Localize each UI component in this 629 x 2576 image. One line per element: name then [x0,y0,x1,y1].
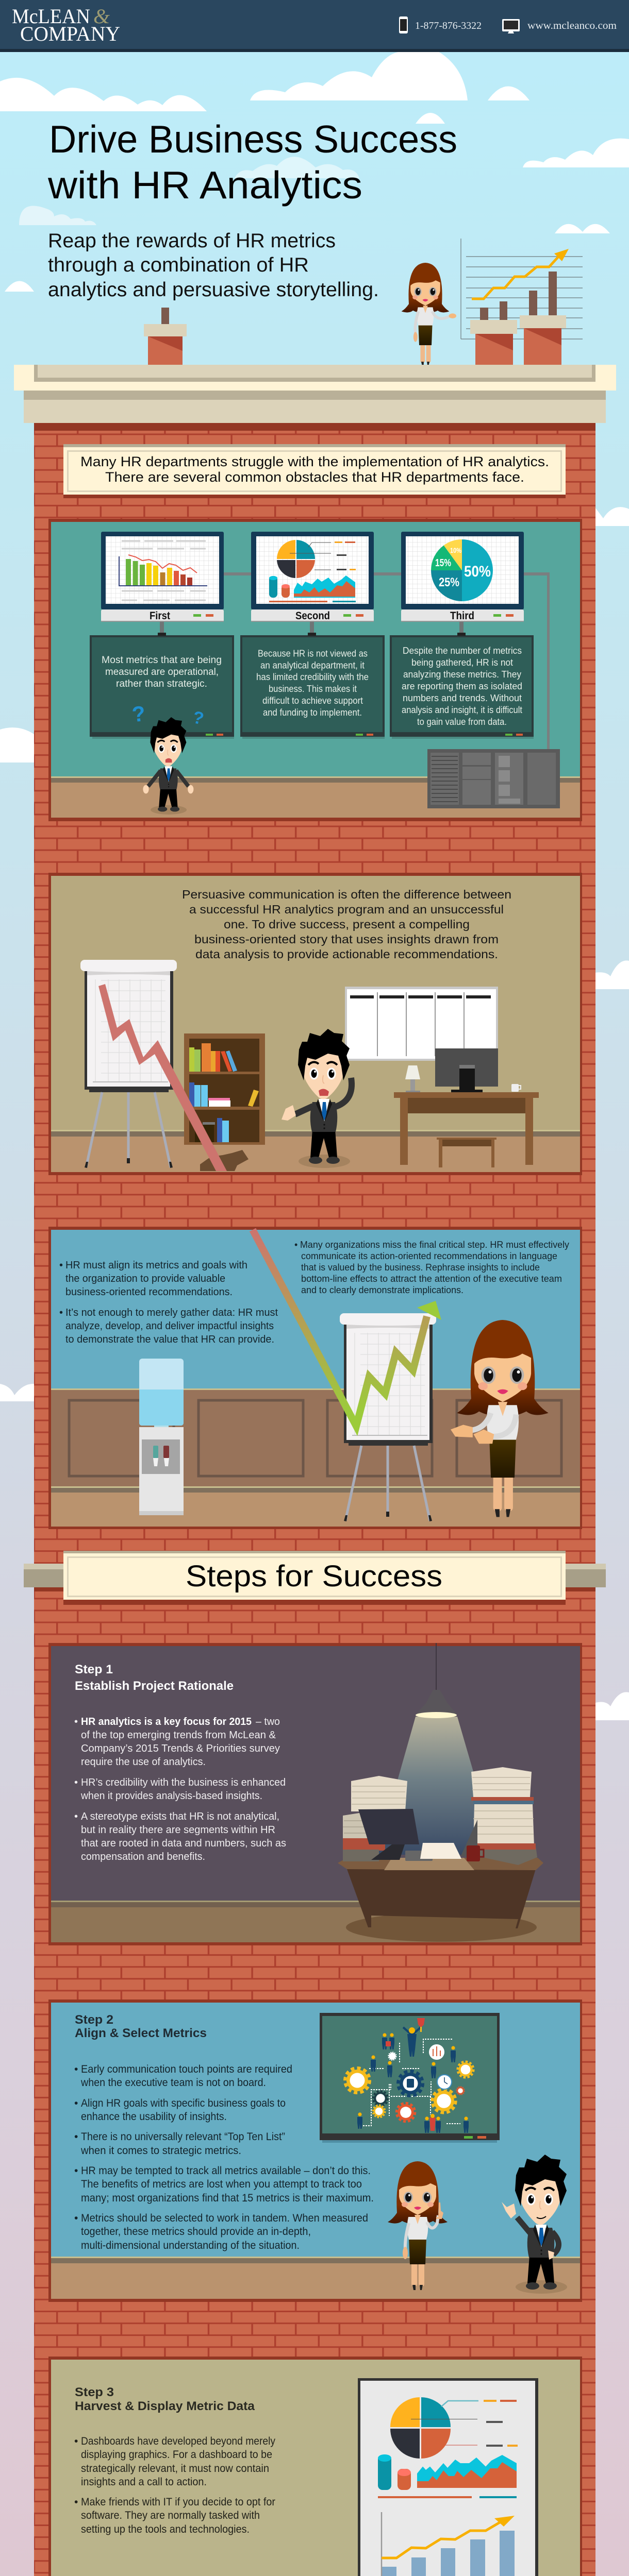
brick building [34,423,595,2576]
panel: obstacles [48,519,582,821]
banner: steps for success: Steps for Success [186,1560,442,1593]
heading: step 1 [75,1663,234,1693]
text block: step 3 bullets: Make friends with IT if you decide to opt for [81,2496,275,2508]
monitor: second: Second [295,610,330,622]
text block: step 1 bullets: • [74,1777,78,1788]
banner: steps for success [24,1551,606,1605]
text block: step 1 bullets: require the use of analytics. [81,1756,206,1768]
window blinds [345,987,498,1061]
board: third obstacle: analysis and insight, it is difficult [402,705,522,715]
text block: persuasive communication: one. To drive success, present a compelling [224,918,470,931]
text block: step 1 bullets: compensation and benefits. [81,1851,205,1862]
text block: step 2 bullets: • [74,2165,78,2177]
text block: step 2 bullets: • [74,2063,78,2075]
text block: step 1 bullets: Company’s 2015 Trends & Priorities survey [81,1743,280,1754]
text block: step 1 bullets: but in reality there are segments within HR [81,1824,275,1836]
board: dashboard [358,2378,538,2576]
desktop computer [358,1809,484,1861]
text block: final step: communicate its action-oriented recommendations in language [301,1251,557,1261]
text block: align metrics: the organization to provide valuable [65,1273,225,1284]
board: third obstacle: analyzing these metrics. They [403,669,521,680]
text block: align metrics: to demonstrate the value that HR can provide. [65,1334,274,1345]
pie chart [390,2397,518,2459]
text block: step 3 bullets: • [74,2435,78,2447]
text block: step 1 bullets [74,1716,286,1862]
title: with HR Analytics [47,163,362,207]
text block: persuasive communication: business-oriented story that uses insights drawn from [194,933,499,946]
text block: align metrics: HR must align its metrics and goals with [65,1260,247,1271]
bookshelf [184,1033,265,1145]
monitor: third: 10% [450,546,461,554]
board: second obstacle: and funding to implement. [263,707,362,718]
phone number: 1-877-876-3322 [415,20,482,31]
monitor: third: Third [450,610,474,622]
text block: step 1 bullets: • [74,1811,78,1822]
text block: step 2 bullets: HR may be tempted to track all metrics available – don’t do this. [81,2165,371,2177]
board: third obstacle: numbers and trends. Without [403,693,522,703]
character: woman pointing up [388,2161,448,2290]
text block: step 2 bullets: many; most organizations find that 15 metrics is their maximum. [81,2192,374,2204]
logo: McLEAN [12,5,90,28]
text block: step 2 bullets: together, these metrics should provide an in-depth, [81,2226,311,2238]
chimneys as bars [144,272,566,365]
text block: align metrics: • [59,1307,63,1318]
character: man scratching head [282,1029,352,1168]
board: second obstacle: difficult to achieve support [262,696,363,706]
panel: step 2 [48,1999,582,2302]
monitor: third [401,532,524,622]
panel: final critical step [48,1227,582,1529]
banner: intro: Many HR departments struggle with the implementation of HR analytics. [80,454,549,469]
text block: step 1 bullets: • [74,1716,78,1727]
text block: step 3 bullets: insights and a call to action. [81,2476,207,2488]
board: third obstacle: Despite the number of metrics [403,646,522,656]
text block: align metrics: It’s not enough to merely gather data: HR must [65,1307,278,1318]
text block: final step: and to clearly demonstrate implications. [301,1285,464,1295]
text block: step 2 bullets: when the executive team is not on board. [80,2077,266,2089]
character: worried man [143,717,193,815]
text block: step 2 bullets: Metrics should be selected to work in tandem. When measured [81,2212,368,2224]
water cooler [139,1359,184,1515]
text block: persuasive communication: a successful HR analytics program and an unsuccessful [189,903,504,916]
text block: step 3 bullets [74,2435,275,2535]
website: www.mcleanco.com [527,20,617,31]
icon: question marks: ? [131,701,146,726]
text block: persuasive communication [182,888,511,961]
text block: step 3 bullets: software. They are normally tasked with [81,2510,260,2521]
board: third obstacle: being gathered, HR is not [411,657,513,668]
text block: step 2 bullets [74,2063,374,2251]
board: second obstacle: business. This makes it [269,684,357,694]
subtitle: Reap the rewards of HR metrics [48,230,336,252]
heading: step 3: Step 3 [75,2385,114,2399]
text block: step 2 bullets: Align HR goals with specific business goals to [81,2097,286,2109]
arrow: falling trend [98,984,249,1171]
text block: step 1 bullets: that are rooted in data and numbers, such as [81,1838,286,1849]
roof cornice [14,365,616,423]
text block: step 2 bullets: There is no universally relevant “Top Ten List” [81,2131,285,2143]
illustration: lamp over desk [338,1643,543,1942]
banner: intro: There are several common obstacles that HR departments face. [105,469,524,485]
board: second obstacle: an analytical department, it [260,660,365,671]
board: first obstacle [90,633,234,739]
heading: step 2: Step 2 [75,2013,113,2027]
subtitle: analytics and persuasive storytelling. [48,279,379,301]
text block: step 2 bullets: The benefits of metrics are lost when you attempt to track too [81,2178,362,2190]
text block: final step: Many organizations miss the final critical step. HR must effectively [300,1240,569,1250]
flip chart [340,1313,436,1521]
heading: step 2 [75,2013,207,2040]
flip chart [80,960,177,1168]
character: woman presenting [451,1320,549,1517]
text block: align metrics: analyze, develop, and deliver impactful insights [65,1320,274,1332]
heading: step 3 [75,2385,255,2413]
arrow: rising trend [253,1230,441,1426]
panel: step 1 [48,1643,582,1945]
logo [12,5,120,45]
text block: step 1 bullets: HR’s credibility with the business is enhanced [81,1777,286,1788]
presenter: woman on roof [402,263,456,366]
subtitle [48,230,379,301]
text block: step 2 bullets: enhance the usability of insights. [81,2111,227,2123]
clouds [0,52,629,1720]
monitor: third: 15% [435,557,451,569]
monitor: third: 25% [439,575,459,589]
text block: step 3 bullets: displaying graphics. For a dashboard to be [81,2449,272,2461]
title [47,117,457,207]
board: third obstacle [390,633,534,739]
text block: final step: bottom-line effects to attract the attention of the executive team [301,1274,562,1284]
text block: step 2 bullets: when it comes to strategic metrics. [80,2145,241,2157]
monitor: first: First [150,610,170,622]
banner: intro [63,444,566,498]
icon: question marks [131,701,206,729]
paper stacks [343,1767,537,1865]
text block: persuasive communication: data analysis to provide actionable recommendations. [195,947,498,961]
character: man pointing [502,2155,567,2294]
header bar [0,0,629,52]
logo: COMPANY [20,22,120,45]
cylinders and area chart [378,2454,517,2498]
title: Drive Business Success [49,117,457,161]
panel: step 3 [48,2357,582,2576]
text block: step 3 bullets: Dashboards have developed beyond merely [81,2435,275,2447]
text block: step 2 bullets: Early communication touch points are required [81,2063,292,2075]
monitor: third: 50% [464,563,491,580]
text block: final step [294,1240,569,1295]
text block: step 3 bullets: • [74,2496,78,2508]
logo: & [93,5,110,28]
heading: step 1: Step 1 [75,1663,113,1676]
text block: align metrics: • [59,1260,63,1271]
text block: final step: • [294,1240,297,1250]
text block: step 1 bullets: A stereotype exists that HR is not analytical, [81,1811,279,1822]
desk with computer [394,1048,539,1167]
server rack [427,749,560,808]
text block: step 1 bullets: of the top emerging trends from McLean & [81,1730,276,1741]
chart lines on roof [461,239,583,339]
text block: final step: that is valued by the business. Rephrase insights to include [301,1262,540,1273]
board: network of icons [320,2013,500,2143]
heading: step 1: Establish Project Rationale [75,1679,234,1693]
text block: persuasive communication: Persuasive communication is often the difference between [182,888,511,901]
text block: align metrics [59,1260,278,1345]
text block: step 2 bullets: • [74,2097,78,2109]
board: first obstacle: Most metrics that are being [102,655,222,666]
text block: step 1 bullets: when it provides analysis-based insights. [80,1790,262,1802]
bar chart with trend [382,2512,524,2576]
board: second obstacle [240,633,385,739]
icon: question marks: ? [191,707,206,729]
text block: step 2 bullets: • [74,2212,78,2224]
text block: step 3 bullets: strategically relevant, it must now contain [81,2463,269,2475]
subtitle: through a combination of HR [48,254,309,276]
board: third obstacle: to gain value from data. [417,717,507,727]
text block: step 2 bullets: multi-dimensional understanding of the situation. [81,2240,300,2251]
board: first obstacle: rather than strategic. [116,679,207,689]
board: third obstacle: are reporting them as isolated [402,681,522,691]
monitor: second [251,532,374,622]
heading: step 3: Harvest & Display Metric Data [75,2399,255,2413]
text block: step 1 bullets: HR analytics is a key focus for 2015 [81,1716,252,1727]
board: first obstacle: measured are operational, [105,667,219,677]
monitor: first [101,532,224,622]
heading: step 2: Align & Select Metrics [75,2026,207,2040]
text block: step 3 bullets: setting up the tools and technologies. [81,2523,250,2535]
board: second obstacle: Because HR is not viewed as [258,648,368,658]
text block: align metrics: business-oriented recommendations. [65,1286,233,1298]
panel: persuasive communication [48,873,582,1175]
text block: step 2 bullets: • [74,2131,78,2143]
board: second obstacle: has limited credibility with the [256,672,369,682]
arrow: rising trend [472,249,569,299]
text block: step 1 bullets: – two [256,1716,280,1727]
icon: phone [399,16,408,33]
icon: monitor [502,19,520,33]
